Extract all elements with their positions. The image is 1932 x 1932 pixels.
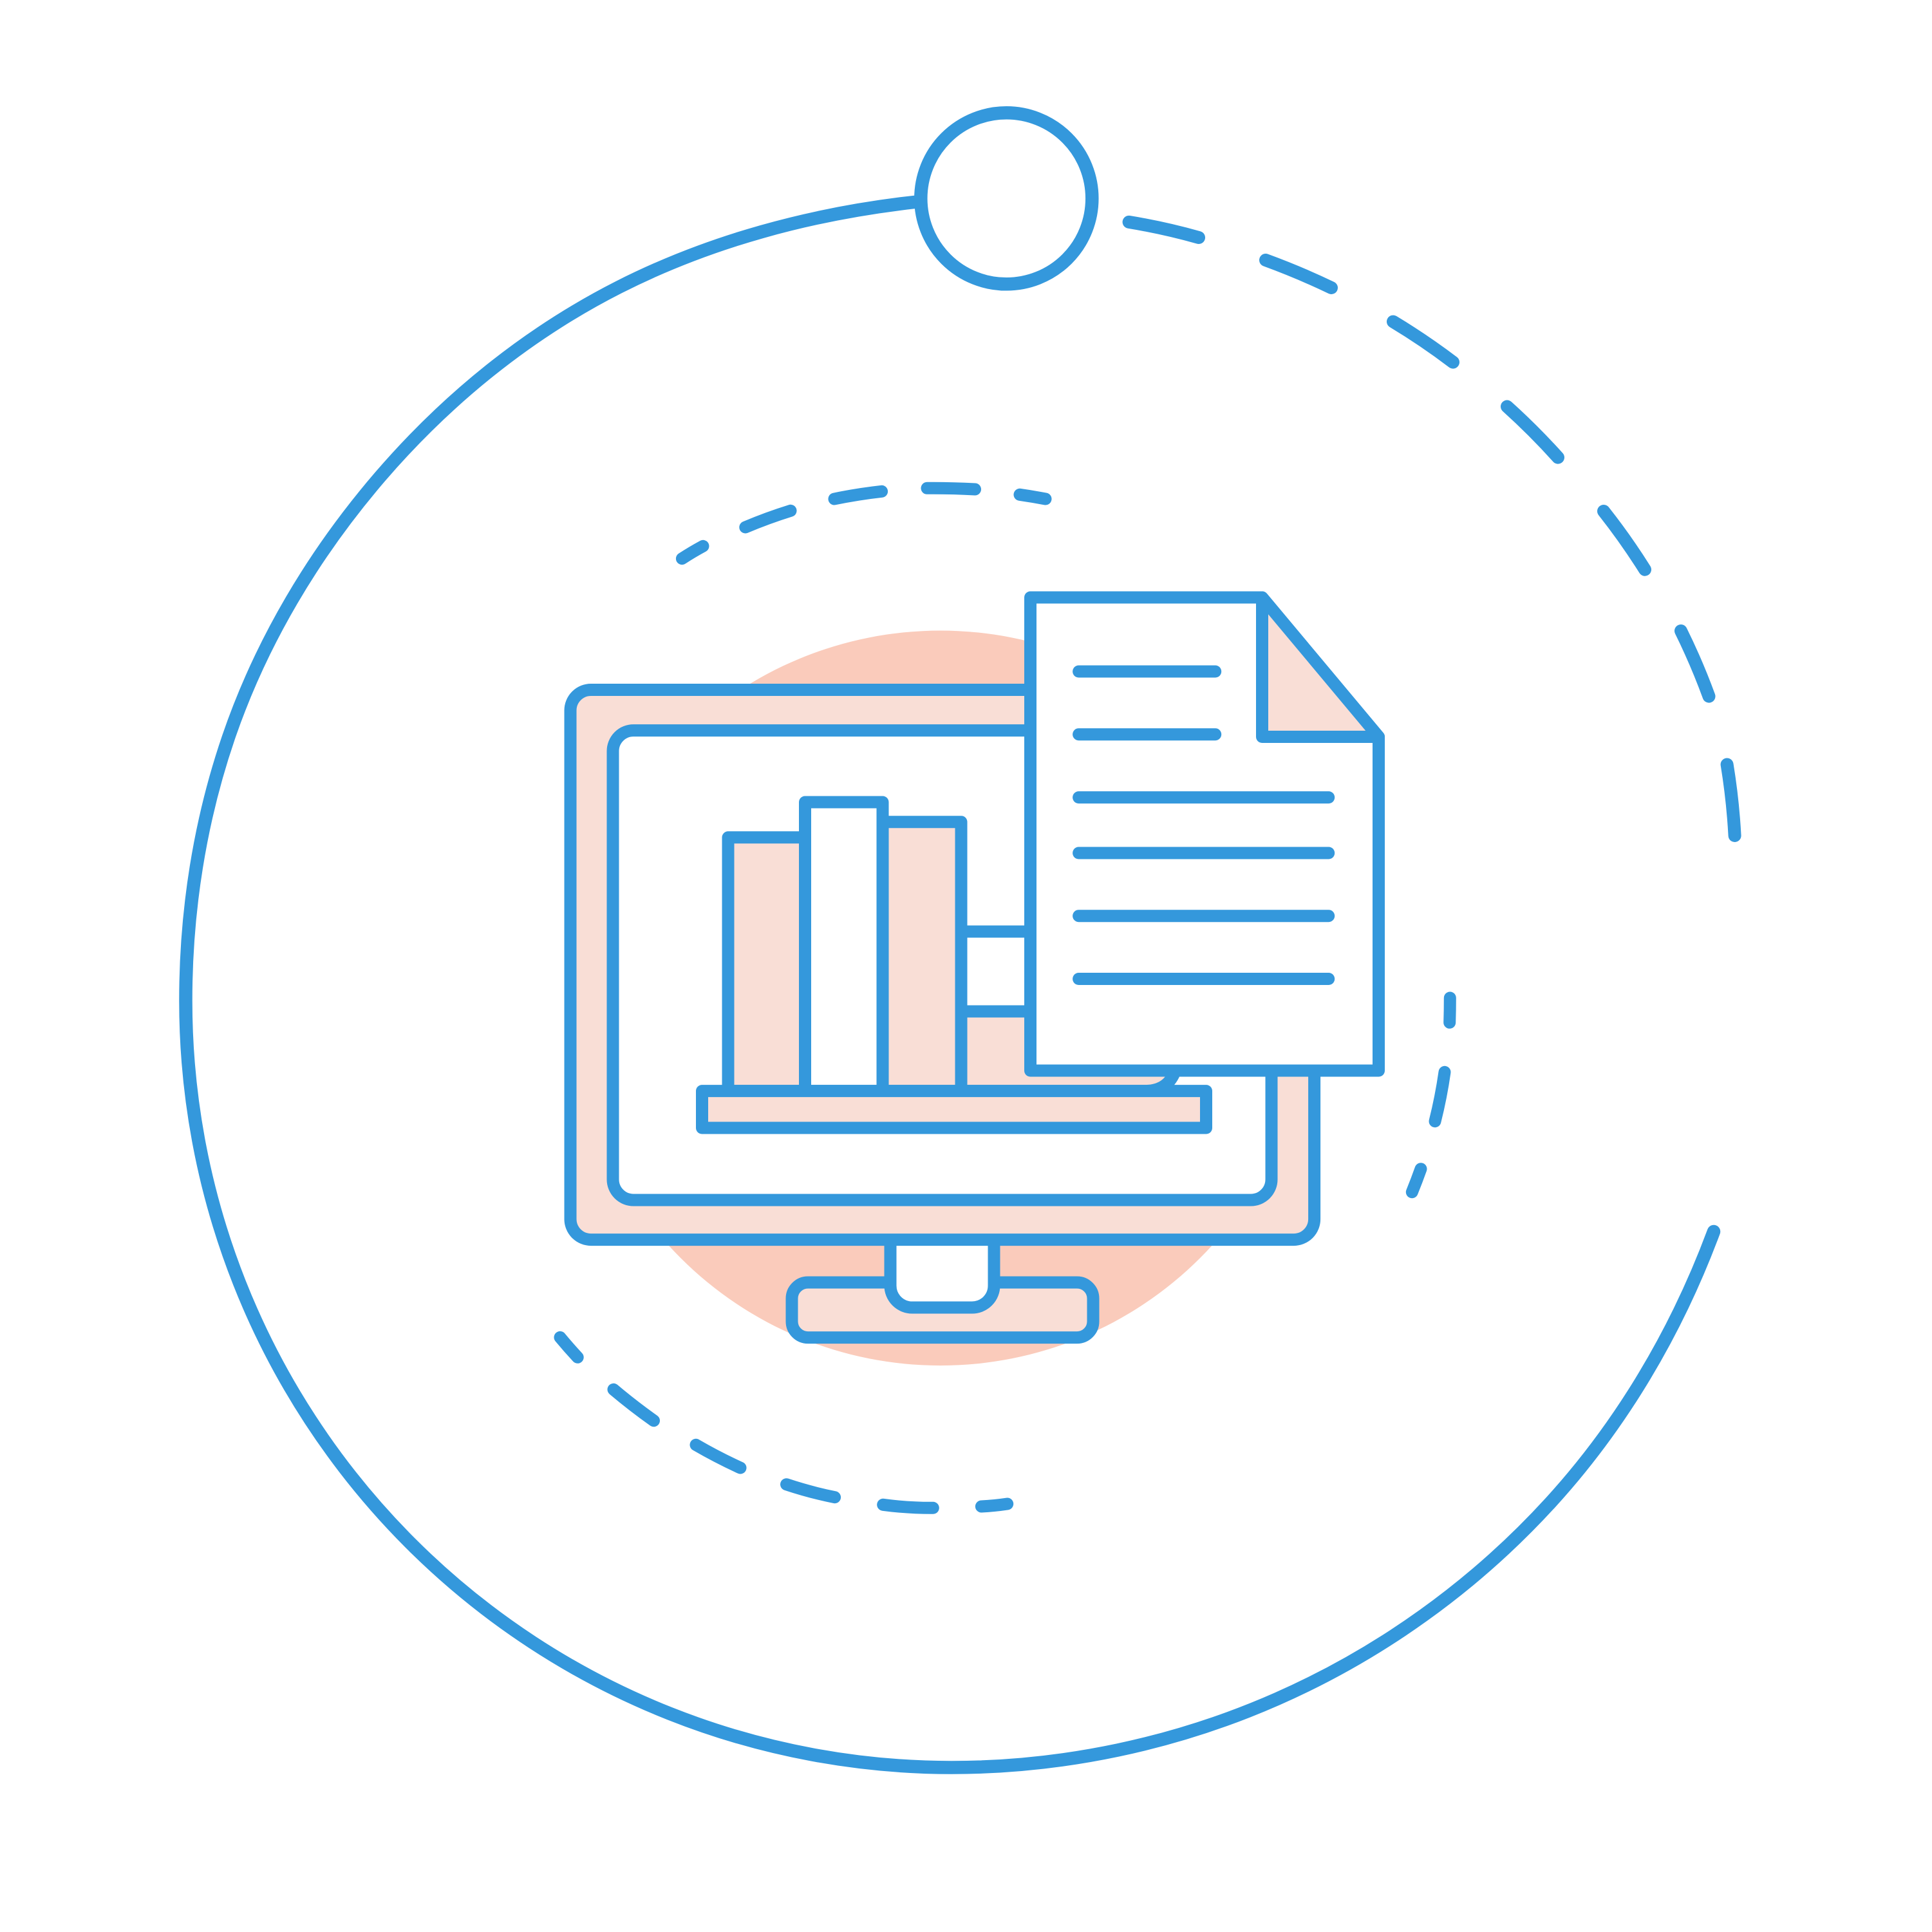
inner dashed arc: top xyxy=(682,488,1046,559)
bar 1 xyxy=(728,838,805,1091)
inner dashed arc: bottom xyxy=(560,1337,1008,1508)
outer dashed arc xyxy=(1129,222,1735,836)
bar 5 rounded corner xyxy=(961,1011,1176,1091)
document folded corner xyxy=(1262,597,1379,736)
bar chart xyxy=(702,802,1206,1128)
large orbit arc xyxy=(185,202,1714,1768)
bar 5 outline xyxy=(961,1070,1176,1091)
document xyxy=(1030,597,1379,1071)
inner dashed arc: right xyxy=(1412,998,1450,1192)
monitor body xyxy=(570,690,1315,1240)
chart baseline shelf xyxy=(702,1091,1206,1128)
document sheet xyxy=(1030,597,1379,1071)
bar 3 xyxy=(883,822,961,1091)
bar 2 xyxy=(805,802,883,1091)
background circle xyxy=(573,631,1308,1365)
monitor stand neck xyxy=(890,1239,994,1308)
orbit node circle xyxy=(921,113,1092,284)
document text lines xyxy=(1079,671,1329,979)
monitor xyxy=(570,690,1315,1338)
bar 4 xyxy=(961,932,1056,1011)
monitor screen xyxy=(613,731,1271,1200)
monitor base xyxy=(792,1282,1093,1338)
bar 5 partly hidden xyxy=(961,1011,1056,1091)
